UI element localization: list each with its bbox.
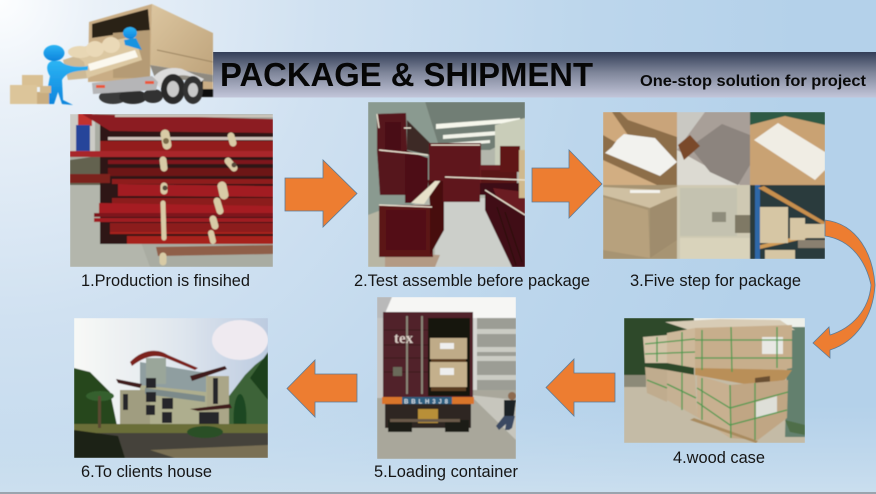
sofa xyxy=(63,52,90,80)
photo 1: stacked red frames xyxy=(70,114,273,267)
photo 2: test assembled cabinets xyxy=(368,102,525,267)
pallets xyxy=(430,338,467,359)
label 4: 4.wood case xyxy=(673,449,765,467)
trees xyxy=(74,368,118,435)
cardboard boxes xyxy=(22,75,43,87)
label 6: 6.To clients house xyxy=(81,463,212,481)
photo 5: loading container: BBLH3J8 xyxy=(404,400,449,406)
cell 4 xyxy=(603,185,677,259)
cell 6 xyxy=(750,185,825,259)
arrow 2 xyxy=(532,150,602,218)
crates xyxy=(665,319,795,332)
tall cabinet xyxy=(377,113,407,195)
container logo: tex xyxy=(394,331,414,347)
label 2: 2.Test assemble before package xyxy=(354,272,590,290)
blue figure front xyxy=(44,45,64,61)
label 1: 1.Production is finsihed xyxy=(81,272,250,290)
label 5: 5.Loading container xyxy=(374,463,518,481)
icon: delivery truck with blue figures xyxy=(10,4,213,105)
chassis and wheels xyxy=(150,65,213,82)
truck rear xyxy=(382,397,402,404)
right island xyxy=(485,190,525,267)
arrow 6 xyxy=(287,360,357,417)
subtitle: One-stop solution for project xyxy=(640,73,866,90)
photo 6: client's house xyxy=(74,318,268,458)
label 3: 3.Five step for package xyxy=(630,272,801,290)
cell 5 xyxy=(677,185,750,259)
tailgate xyxy=(92,76,158,94)
rear wheels xyxy=(99,90,127,104)
curved arrow from step 3 to step 4 xyxy=(813,220,875,358)
gardens xyxy=(74,424,268,434)
back wall xyxy=(429,143,481,181)
title: PACKAGE & SHIPMENT xyxy=(220,57,594,94)
container xyxy=(383,312,473,397)
photo 5: loading container xyxy=(377,297,516,459)
cell 2 xyxy=(677,112,750,185)
truck box xyxy=(150,4,213,75)
arrow 1 xyxy=(285,160,357,227)
title banner xyxy=(213,52,876,98)
cell 1 xyxy=(603,112,677,185)
worker xyxy=(508,392,516,400)
cell 3 xyxy=(750,112,825,185)
house xyxy=(140,372,208,426)
photo 3: five-step packaging collage xyxy=(603,112,825,259)
blue figure rear xyxy=(123,27,137,39)
photo 4: wood cases xyxy=(624,318,805,443)
arrow 5 xyxy=(546,359,615,416)
